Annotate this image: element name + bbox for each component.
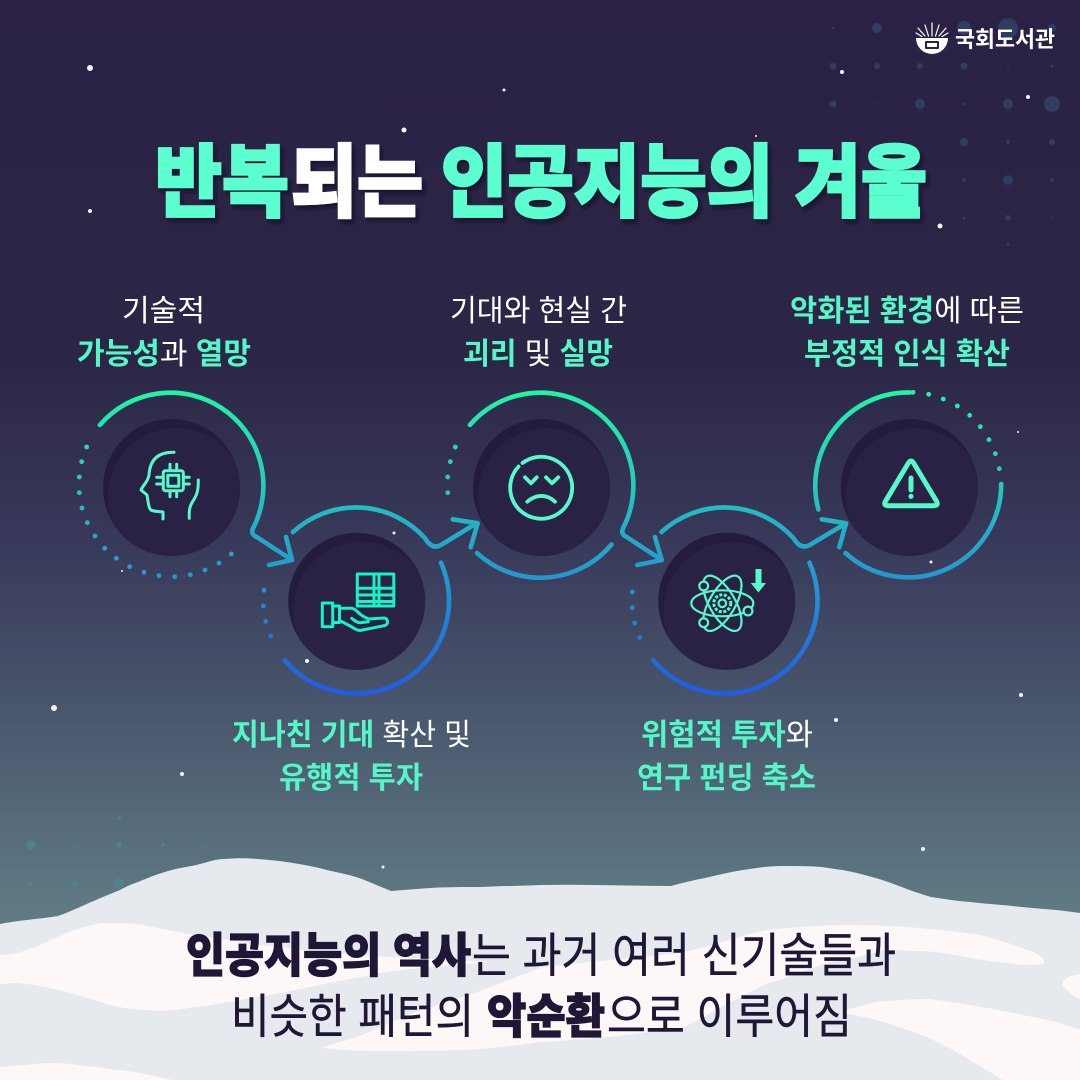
step 3 label: 기대와 현실 간: [450, 295, 627, 328]
conclusion text: 비슷한 패턴의: [231, 990, 474, 1043]
step 1 arrow ring: [100, 393, 292, 565]
step 5 label: [790, 295, 1024, 371]
snow: back layer: [0, 858, 1080, 1080]
step 1 node: technical potential: [77, 393, 292, 579]
down arrow: [751, 569, 766, 592]
logo emblem: [916, 23, 948, 54]
step 2 dotted ring: [261, 588, 273, 638]
step 2 label: 유행적 투자: [279, 762, 423, 795]
step 1 dotted ring: [77, 445, 234, 579]
title: 되는: [291, 138, 423, 227]
title: 인공지능의: [441, 138, 773, 227]
step 5 ring: [815, 392, 1001, 577]
snow: right light band: [322, 925, 1044, 1051]
step 4 arrow ring: [653, 507, 846, 694]
logo: National Assembly Library: [916, 23, 1055, 54]
conclusion text: 는 과거 여러 신기술들과: [472, 929, 896, 982]
step 2 disc: [288, 533, 430, 679]
icon: hand holding money: [322, 574, 394, 630]
logo text: 국회도서관: [955, 27, 1055, 52]
step 1 label: 가능성과 열망: [77, 338, 251, 371]
step 3 node: gap and disappointment: [445, 393, 662, 578]
atom: [691, 570, 753, 637]
title: [155, 138, 927, 227]
step 4 dotted ring: [630, 590, 642, 640]
step 4 node: dangerous investment and funding cuts: [630, 507, 846, 694]
step 3 label: [450, 295, 627, 371]
step 4 label: [637, 719, 816, 795]
step 3 dotted ring: [445, 445, 458, 495]
step 4 disc: [658, 533, 800, 679]
step 5 disc: [841, 419, 983, 565]
step 4 label: 연구 펀딩 축소: [637, 762, 816, 795]
step 1 label: 기술적: [122, 295, 205, 328]
conclusion text: 으로 이루어짐: [607, 990, 852, 1043]
stars: [51, 65, 1030, 868]
step 3 label: 괴리 및 실망: [463, 338, 613, 371]
step 1 label: [77, 295, 251, 371]
icon: sad face: [510, 457, 572, 519]
snow: bottom left band: [0, 1063, 172, 1080]
icon: warning triangle: [885, 461, 937, 506]
step 1 disc: [103, 419, 245, 565]
title: 반복: [155, 138, 289, 227]
conclusion text: 인공지능의 역사: [186, 929, 471, 982]
bokeh lights: bottom left: [26, 816, 208, 888]
step 3 arrow ring: [470, 393, 662, 578]
snow: right edge blob: [1063, 974, 1080, 999]
conclusion text: 악순환: [487, 990, 605, 1043]
step 5 label: 부정적 인식 확산: [804, 338, 1010, 371]
icon: head with chip: [141, 452, 198, 519]
step 5 dotted ring: [911, 390, 1002, 471]
step 3 disc: [473, 419, 615, 565]
step 2 arrow ring: [285, 507, 478, 694]
step 2 label: [232, 719, 471, 795]
snow: left light band: [0, 923, 490, 1011]
step 5 node: negative perception: [815, 390, 1002, 577]
snow: lower right band: [840, 999, 1080, 1080]
snow hills: [0, 858, 1080, 1080]
step 4 label: 위험적 투자와: [641, 719, 813, 752]
step 2 node: hype and trend investment: [261, 507, 478, 694]
step 5 label: 악화된 환경에 따른: [790, 295, 1024, 328]
icon: atom with down arrow: [691, 569, 766, 637]
conclusion text: [186, 929, 896, 1043]
step 2 label: 지나친 기대 확산 및: [232, 719, 471, 752]
title: 겨울: [795, 138, 927, 227]
bokeh lights: top right: [830, 18, 1060, 246]
